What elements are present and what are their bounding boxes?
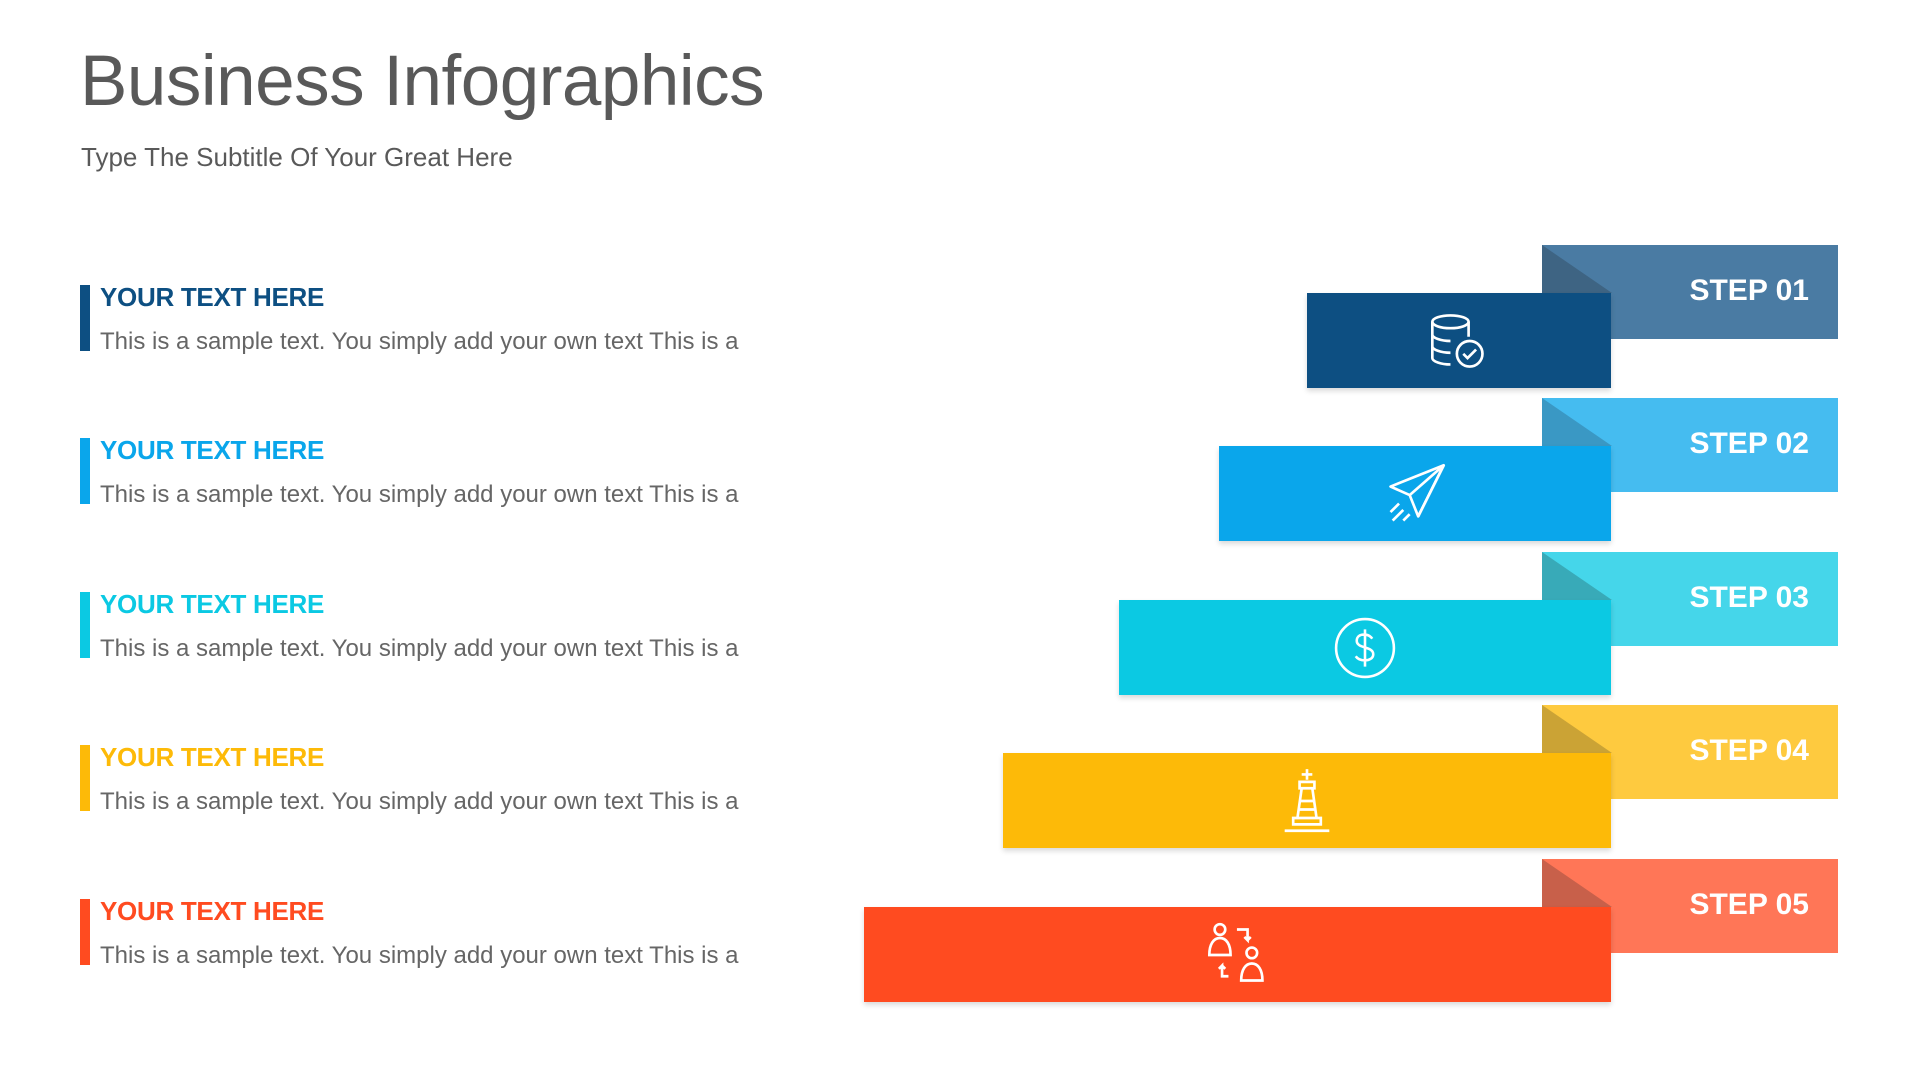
text block 4 <box>80 742 739 815</box>
step tab 01 <box>1542 245 1838 339</box>
front bar 4 with chess king icon <box>1003 753 1611 848</box>
front bar 1 with database icon <box>1307 293 1611 388</box>
step tab 01: STEP 01 <box>1689 274 1809 307</box>
text block 4: YOUR TEXT HERE <box>100 742 324 772</box>
step tab 05: STEP 05 <box>1689 888 1809 921</box>
front bar 3 with dollar icon <box>1119 600 1611 695</box>
subtitle: Type The Subtitle Of Your Great Here <box>81 142 513 172</box>
text block 3: This is a sample text. You simply add your own text This is a <box>100 635 739 662</box>
text block 5: This is a sample text. You simply add your own text This is a <box>100 942 739 969</box>
text block 3: YOUR TEXT HERE <box>100 589 324 619</box>
text block 1 <box>80 282 739 355</box>
icon: dollar coin <box>1334 618 1396 678</box>
step tab 03: STEP 03 <box>1689 581 1809 614</box>
icon: database check <box>1431 314 1484 368</box>
icon: chess king <box>1284 769 1330 832</box>
front bar 2 with paper plane icon <box>1219 446 1611 541</box>
text block 5 <box>80 896 739 969</box>
step tab 02: STEP 02 <box>1689 427 1809 460</box>
text block 2 <box>80 435 739 508</box>
step tab 05 <box>1542 859 1838 953</box>
step tab 04: STEP 04 <box>1689 734 1809 767</box>
step tab 03 <box>1542 552 1838 646</box>
text block 4: This is a sample text. You simply add your own text This is a <box>100 788 739 815</box>
icon: paper plane <box>1389 464 1446 522</box>
text block 5: YOUR TEXT HERE <box>100 896 324 926</box>
icon: people exchange <box>1208 922 1264 982</box>
text block 3 <box>80 589 739 662</box>
step tab 04 <box>1542 705 1838 799</box>
text block 2: YOUR TEXT HERE <box>100 435 324 465</box>
text block 1: YOUR TEXT HERE <box>100 282 324 312</box>
front bar 5 with people exchange icon <box>864 907 1611 1002</box>
text block 1: This is a sample text. You simply add your own text This is a <box>100 328 739 355</box>
text block 2: This is a sample text. You simply add your own text This is a <box>100 481 739 508</box>
title: Business Infographics <box>80 42 764 121</box>
step tab 02 <box>1542 398 1838 492</box>
